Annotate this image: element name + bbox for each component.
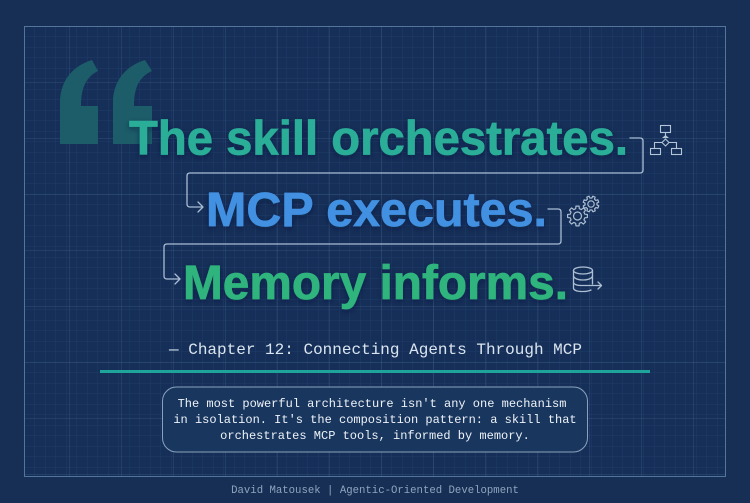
headline: MCP executes: MCP executes. [206,184,547,237]
footer credit: David Matousek | Agentic-Oriented Development [231,485,519,497]
icon: flowchart [650,126,682,154]
icon: gears [568,194,601,226]
arrow: MCP to memory [164,209,561,284]
callout: The most powerful architecture isn't any one mechanism [178,397,566,411]
callout: orchestrates MCP tools, informed by memory. [220,429,530,443]
headline: the skill orchestrates: The skill orchestrates. [129,112,628,166]
decorative quotation mark [60,60,152,144]
arrow: skill to MCP [187,138,643,212]
callout: in isolation. It's the composition pattern: a skill that [173,413,577,427]
headline: memory informs: Memory informs. [183,257,568,310]
callout [162,387,588,452]
teal divider [100,370,650,373]
icon: database with arrow [574,267,602,292]
chapter attribution: — Chapter 12: Connecting Agents Through MCP [168,341,582,359]
